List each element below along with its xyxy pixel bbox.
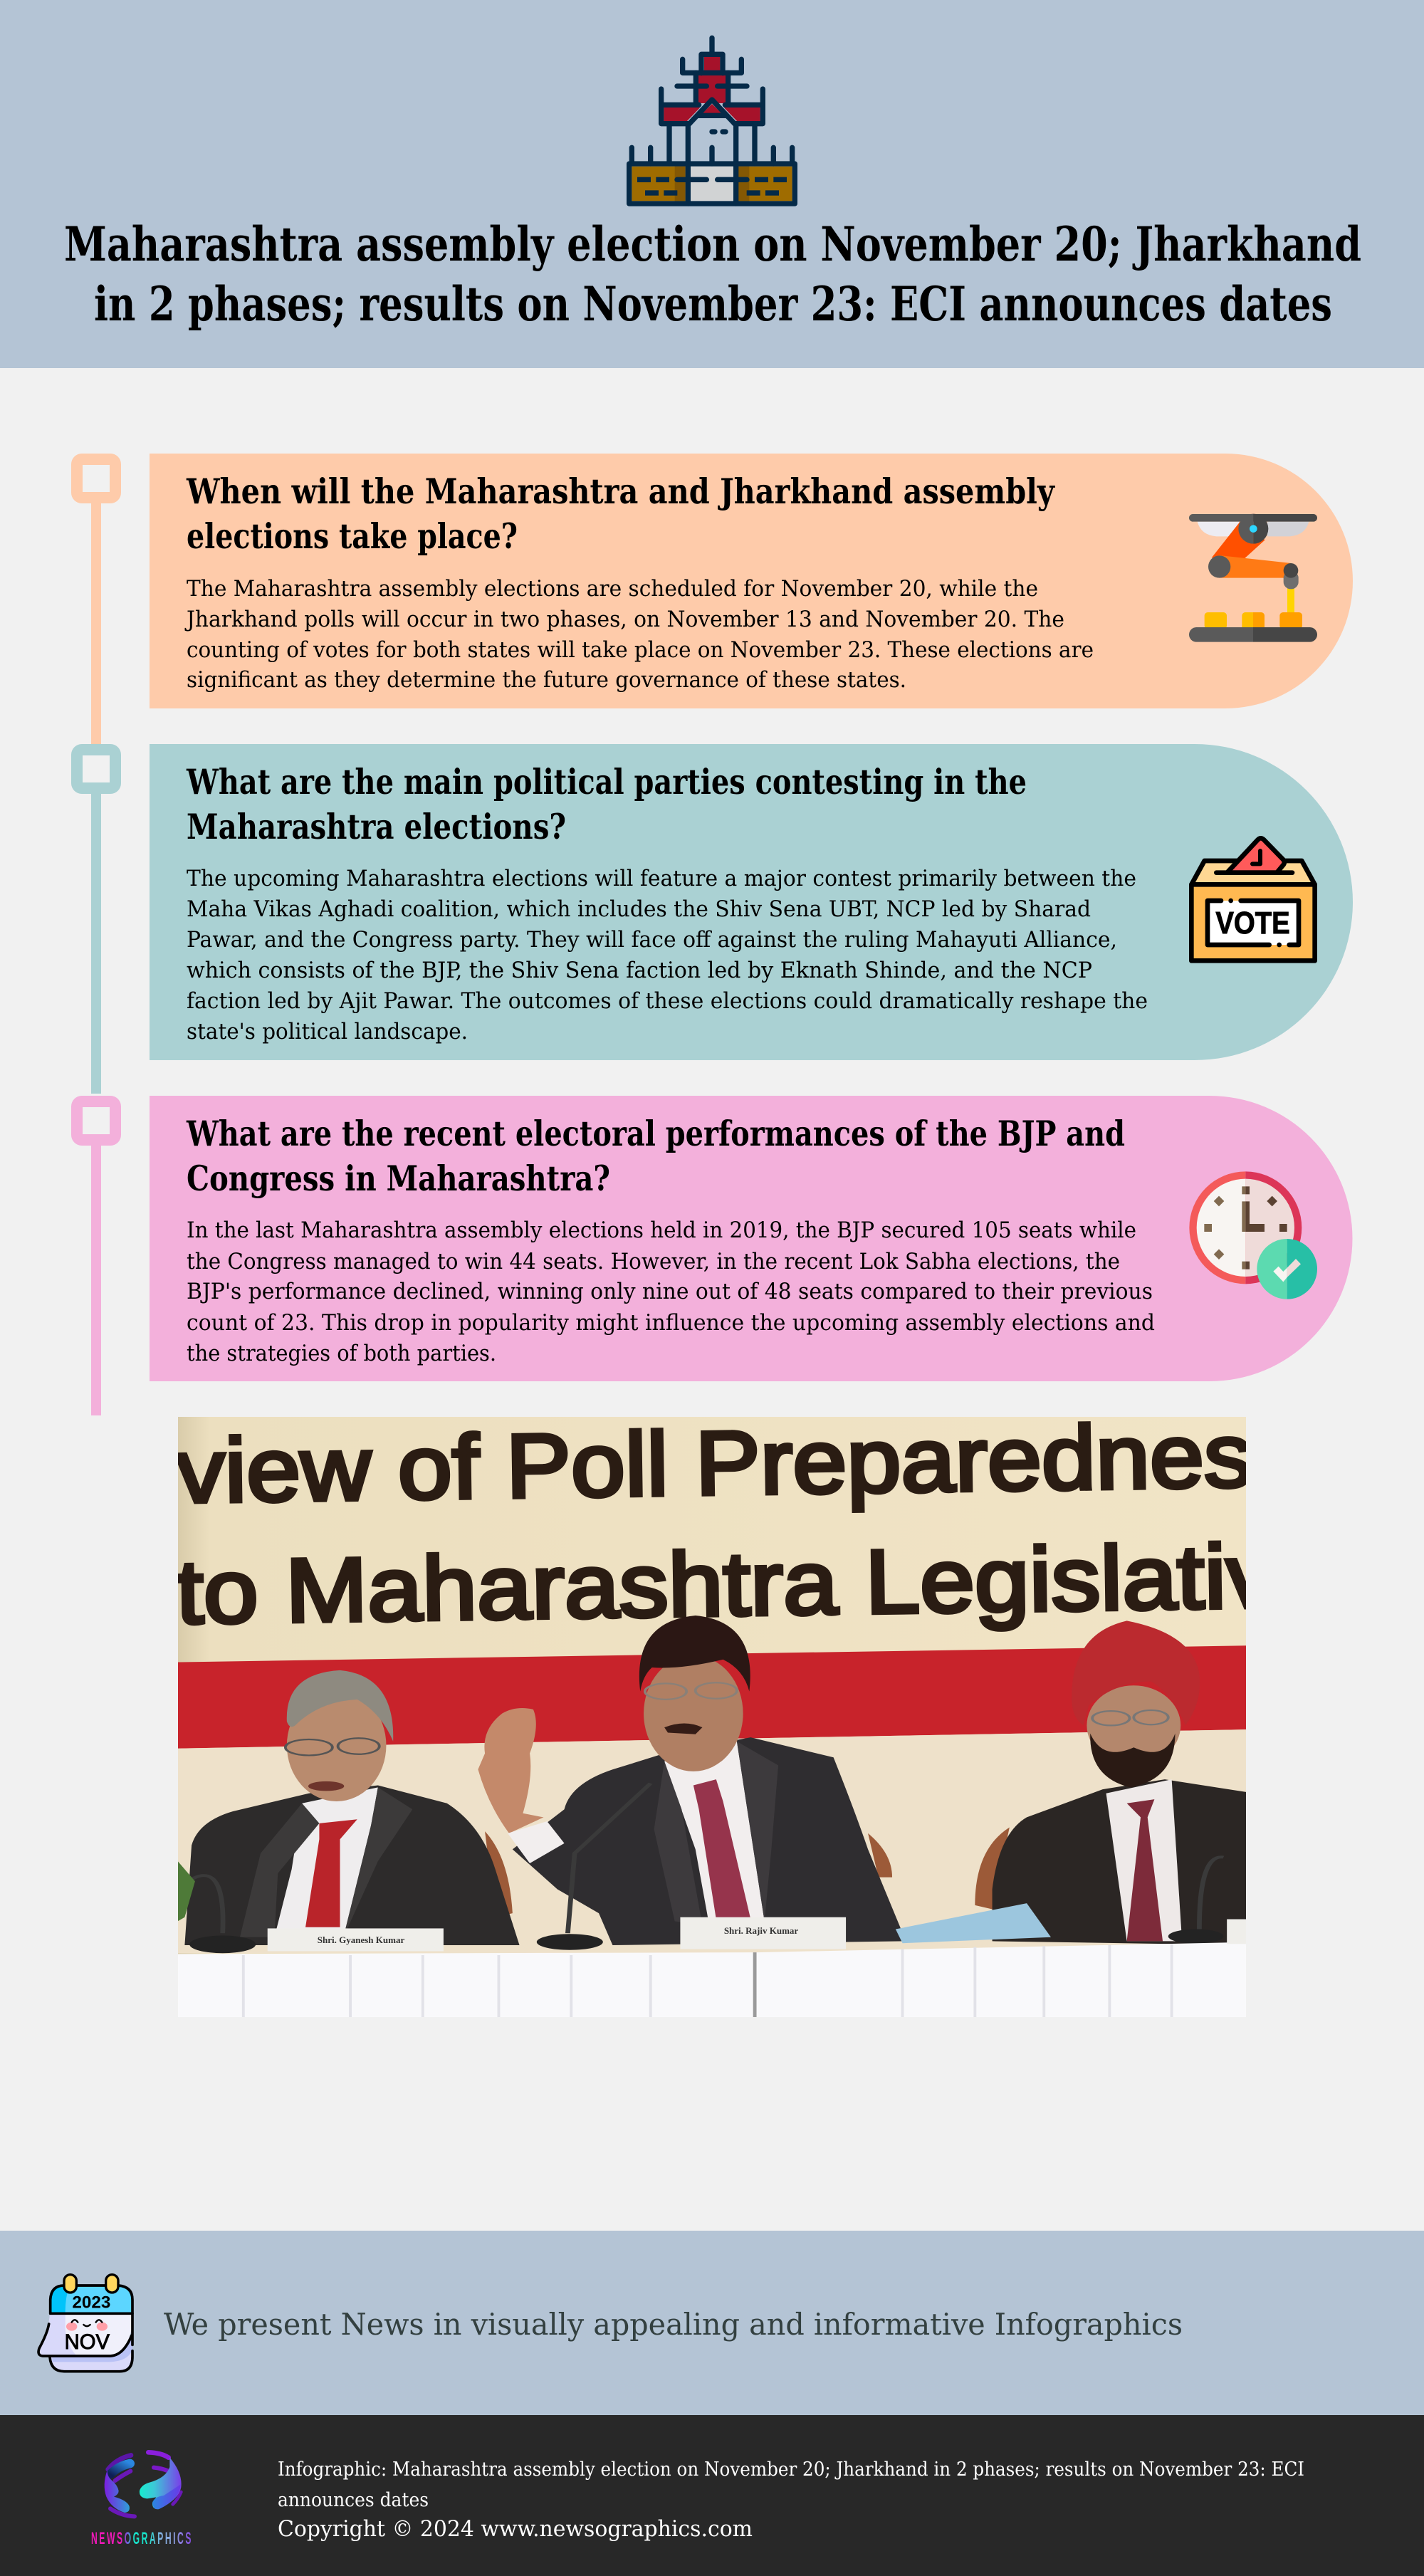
- footer credit text: announces dates: [278, 2489, 429, 2511]
- banner text: view of Poll Preparednes: [175, 1405, 1253, 1522]
- footer band: [0, 2415, 1424, 2576]
- body text: The upcoming Maharashtra elections will feature a major contest primarily between the: [187, 866, 1136, 891]
- meeting scene: [171, 1616, 1255, 2021]
- icon label: 2023: 2023: [72, 2293, 110, 2313]
- icon: clock with check badge: [1189, 1171, 1317, 1299]
- body text: [187, 866, 1148, 1044]
- body text: significant as they determine the future governance of these states.: [187, 667, 906, 693]
- panel: recent electoral performances: [150, 1096, 1353, 1381]
- header band: [0, 0, 1424, 368]
- body text: the Congress managed to win 44 seats. However, in the recent Lok Sabha elections, the: [187, 1249, 1120, 1274]
- logo: NewsoGraphics: [91, 2452, 193, 2548]
- timeline marker 2: [71, 744, 121, 794]
- body text: counting of votes for both states will take place on November 23. These elections are: [187, 637, 1094, 663]
- heading: Maharashtra elections?: [187, 806, 566, 847]
- panel: main political parties: [150, 744, 1353, 1060]
- left person: [184, 1670, 520, 1945]
- banner text: [178, 1421, 1246, 1632]
- heading: elections take place?: [187, 515, 518, 557]
- heading: [186, 1113, 1125, 1199]
- name plates text: Shri. Gyanesh Kumar: [318, 1934, 404, 1945]
- body text: the strategies of both parties.: [187, 1341, 496, 1366]
- footer credit text: [278, 2459, 1304, 2542]
- microphones: [188, 1784, 1223, 1933]
- photo: poll preparedness press conference: [171, 1405, 1277, 2021]
- body text: which consists of the BJP, the Shiv Sena faction led by Eknath Shinde, and the NCP: [187, 958, 1092, 983]
- body text: Jharkhand polls will occur in two phases, on November 13 and November 20. The: [184, 607, 1064, 632]
- tagline: We present News in visually appealing and informative Infographics: [164, 2307, 1183, 2342]
- tagline band: [0, 2231, 1424, 2415]
- icon: robotic arm: [1189, 514, 1317, 642]
- body text: Pawar, and the Congress party. They will face off against the ruling Mahayuti Alliance,: [187, 927, 1117, 953]
- body text: Maha Vikas Aghadi coalition, which includes the Shiv Sena UBT, NCP led by Sharad: [187, 896, 1091, 922]
- panel: when elections take place: [150, 454, 1353, 708]
- icon: temple building: [629, 38, 795, 204]
- heading: What are the main political parties contesting in the: [186, 761, 1027, 802]
- body text: [184, 576, 1094, 693]
- icon: calendar: [38, 2275, 132, 2372]
- icon label: NOV: NOV: [65, 2330, 110, 2354]
- body text: faction led by Ajit Pawar. The outcomes of these elections could dramatically reshape the: [187, 988, 1148, 1014]
- banner text: to Maharashtra Legislativ: [175, 1525, 1277, 1643]
- body text: The Maharashtra assembly elections are scheduled for November 20, while the: [187, 576, 1038, 602]
- body text: BJP's performance declined, winning only nine out of 48 seats compared to their previous: [187, 1279, 1153, 1304]
- name plates text: [318, 1925, 798, 1945]
- heading: [186, 761, 1027, 847]
- title: [64, 216, 1361, 332]
- name plates text: Shri. Rajiv Kumar: [724, 1925, 798, 1936]
- footer credit text: Copyright © 2024 www.newsographics.com: [278, 2516, 753, 2542]
- body text: count of 23. This drop in popularity might influence the upcoming assembly elections and: [187, 1310, 1155, 1336]
- body text: state's political landscape.: [187, 1019, 468, 1044]
- heading: [186, 471, 1055, 557]
- footer credit text: Infographic: Maharashtra assembly election on November 20; Jharkhand in 2 phases; results on November 23: ECI: [278, 2459, 1304, 2481]
- body text: In the last Maharashtra assembly elections held in 2019, the BJP secured 105 seats while: [187, 1218, 1136, 1243]
- body text: [187, 1218, 1155, 1366]
- table cloth: [171, 1942, 1255, 2021]
- timeline: [71, 454, 121, 1415]
- icon label: VOTE: VOTE: [1215, 906, 1290, 941]
- heading: Congress in Maharashtra?: [187, 1158, 610, 1199]
- heading: When will the Maharashtra and Jharkhand assembly: [186, 471, 1055, 512]
- heading: What are the recent electoral performances of the BJP and: [186, 1113, 1125, 1154]
- icon: ballot box: [1191, 838, 1315, 960]
- logo wordmark: NEWSOGRAPHICS: [91, 2529, 193, 2548]
- timeline marker 1: [71, 454, 121, 503]
- timeline marker 3: [71, 1096, 121, 1146]
- papers: [896, 1903, 1051, 1943]
- right person: [993, 1621, 1255, 1945]
- centre person: [478, 1616, 906, 1945]
